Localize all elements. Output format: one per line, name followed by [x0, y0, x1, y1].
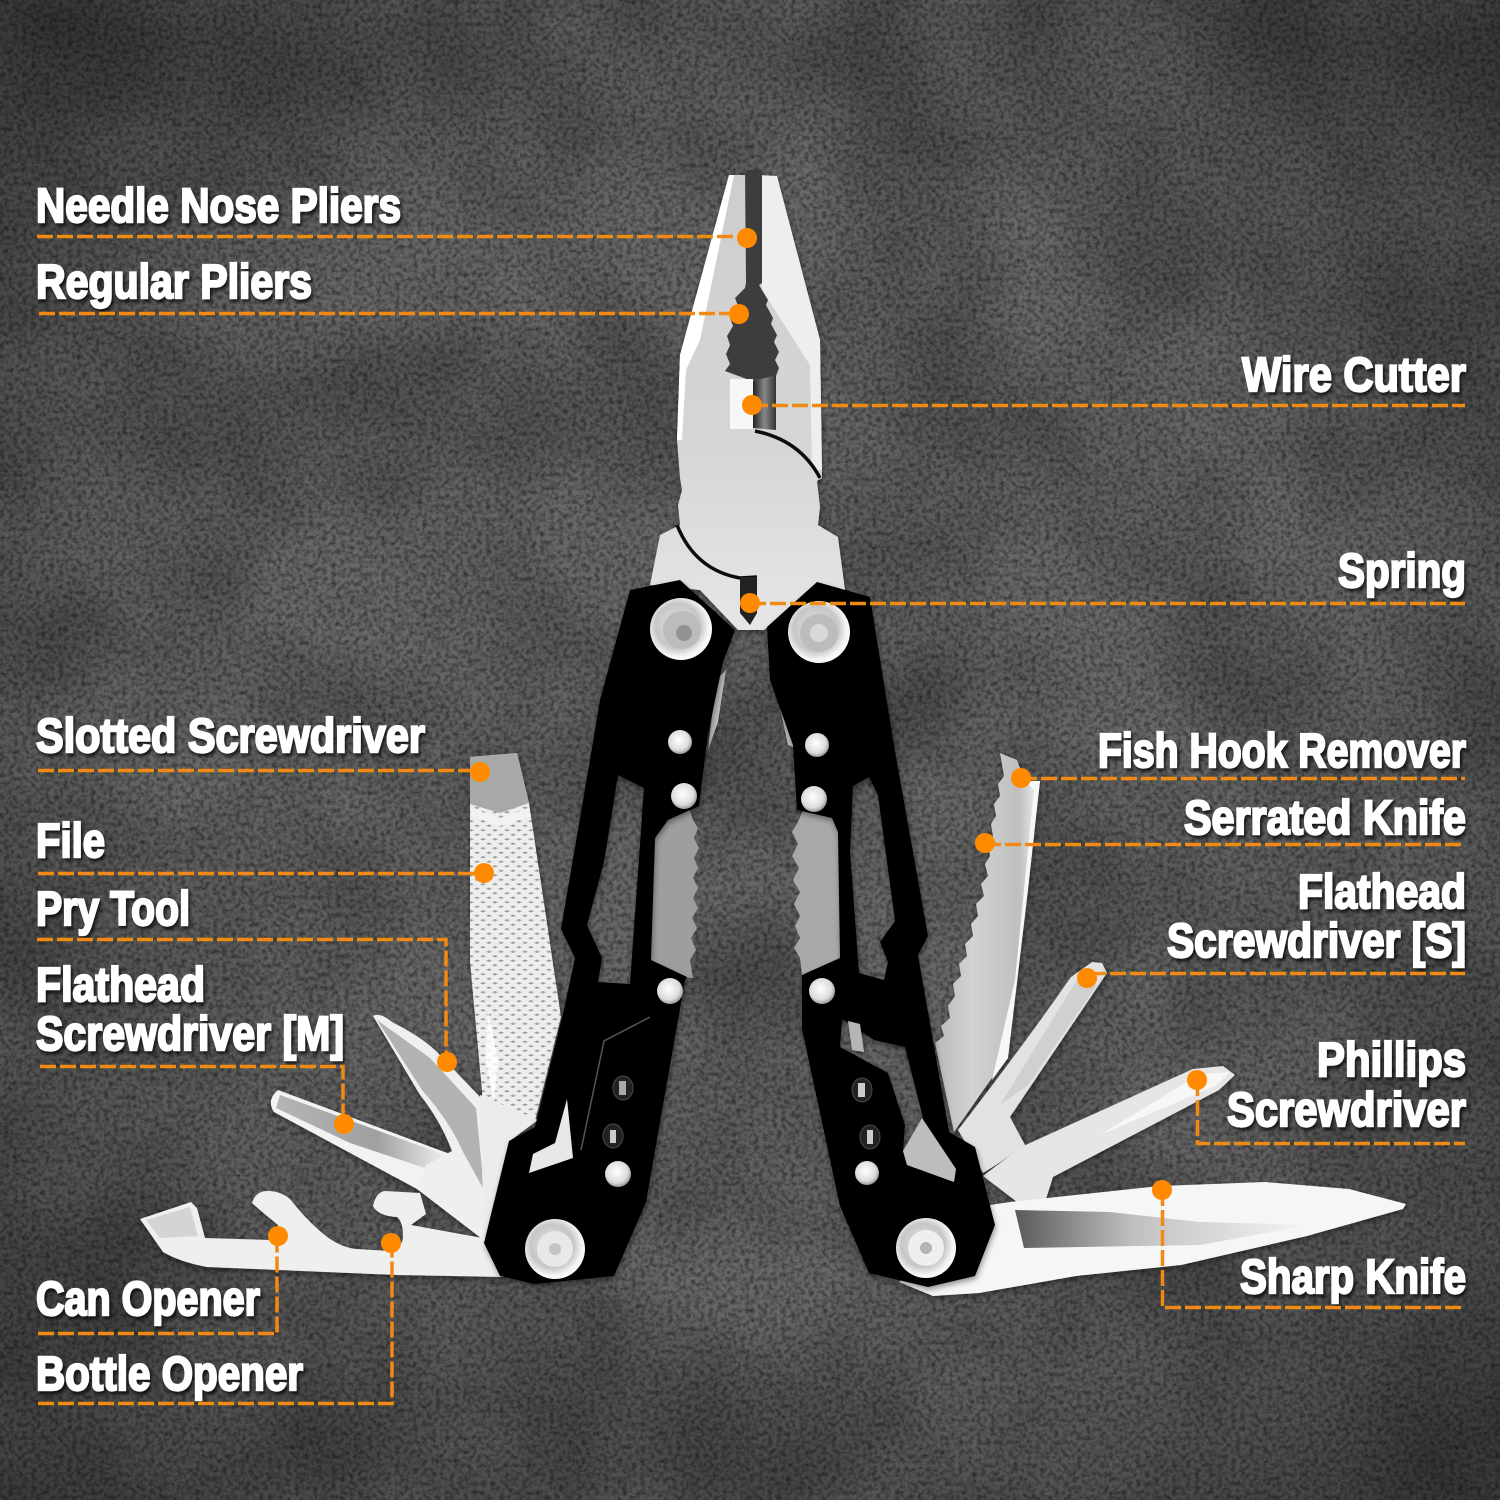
sharp knife: [899, 1182, 1406, 1296]
serrated knife with fish hook remover: [935, 753, 1040, 1132]
callout: Wire Cutter: Wire Cutter: [1242, 349, 1466, 402]
tool group: left fold-out tools: [140, 753, 561, 1277]
callout: Needle Nose Pliers: Needle Nose Pliers: [36, 180, 401, 233]
right handle slots: [852, 1078, 880, 1149]
left handle: [484, 580, 735, 1284]
tool group: right fold-out tools: [899, 753, 1406, 1296]
bottom left bolt: [525, 1219, 585, 1279]
callout: Flathead Screwdriver M: [36, 959, 354, 1134]
callout: Fish Hook Remover: [1011, 725, 1466, 788]
wire cutter: [730, 375, 776, 430]
top right bolt: [788, 601, 850, 663]
callout: Spring: [740, 545, 1466, 613]
callout: Regular Pliers: [36, 256, 749, 324]
callout: File: File: [36, 815, 105, 868]
callout: Serrated Knife: [975, 792, 1466, 853]
callout: Can Opener: Can Opener: [36, 1273, 260, 1326]
phillips screwdriver: [983, 1066, 1235, 1202]
callout: Slotted Screwdriver: Slotted Screwdriver: [36, 710, 425, 763]
inner silver slivers beside handles: [708, 670, 800, 750]
right handle lower silver linkage: [903, 1118, 956, 1182]
pliers steel body: [650, 175, 845, 630]
callout: Bottle Opener: Bottle Opener: [36, 1348, 303, 1401]
callout: Phillips Screwdriver: [1187, 1034, 1466, 1144]
callout: Wire Cutter: [742, 349, 1466, 415]
callout: Bottle Opener: [36, 1233, 401, 1404]
callout: Regular Pliers: Regular Pliers: [36, 256, 312, 309]
callout: Phillips Screwdriver: Phillips: [1317, 1034, 1466, 1087]
top left bolt: [650, 598, 712, 660]
callout: Spring: Spring: [1338, 545, 1466, 598]
left handle slots: [603, 1076, 633, 1148]
file with slotted screwdriver tip: [470, 753, 561, 1239]
right handle small linkage: [848, 1021, 864, 1052]
flathead screwdriver S: [958, 962, 1107, 1173]
callout: Flathead Screwdriver M: Screwdriver [M]: [36, 1008, 344, 1061]
can and bottle opener blade: [140, 1191, 505, 1277]
pliers head: [650, 170, 845, 630]
rivets: [605, 730, 879, 1187]
flathead screwdriver M: [271, 1090, 490, 1245]
bottom right bolt: [896, 1218, 956, 1278]
callout: Flathead Screwdriver S: Flathead: [1298, 866, 1466, 919]
callout: Needle Nose Pliers: [36, 180, 757, 248]
callout: Pry Tool: Pry Tool: [36, 883, 190, 936]
spring: [740, 577, 757, 625]
pliers gripping gap: [725, 170, 779, 381]
right handle: [767, 582, 995, 1287]
callout: Flathead Screwdriver S: [1077, 866, 1466, 988]
left handle lower silver piece: [529, 1099, 573, 1173]
callout: Sharp Knife: [1152, 1180, 1466, 1308]
pry tool: [373, 1015, 490, 1240]
bolts and rivets: [525, 598, 956, 1279]
serrated inner blades visible in handles: [650, 810, 845, 978]
callout: Flathead Screwdriver M: Flathead: [36, 959, 205, 1012]
callout: Can Opener: [36, 1226, 288, 1334]
callout: Phillips Screwdriver: Screwdriver: [1227, 1084, 1466, 1137]
pivot arcs: [677, 431, 820, 578]
left handle lower recess edge: [581, 1017, 650, 1150]
callout: File: [36, 815, 494, 883]
callout: Pry Tool: [36, 883, 457, 1072]
